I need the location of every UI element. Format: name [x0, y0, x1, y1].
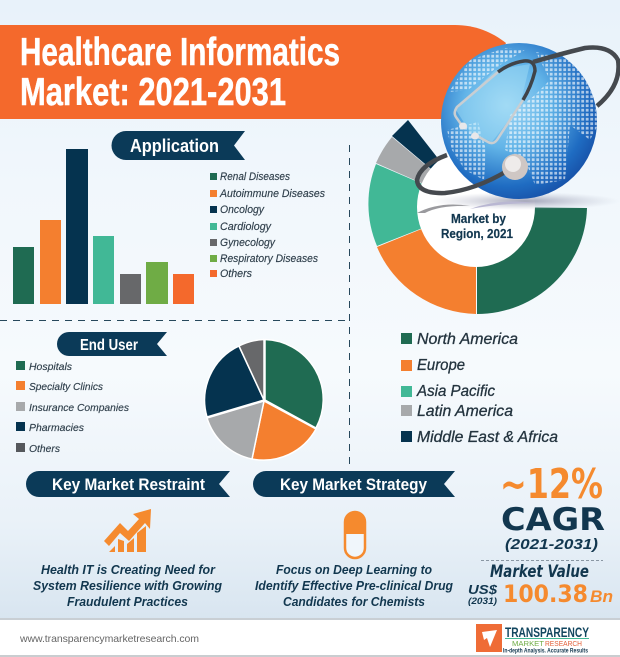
title: Healthcare Informatics — [20, 31, 340, 74]
legend: end user: Pharmacies — [29, 422, 85, 434]
heading: key market restraint: Key Market Restraint — [52, 475, 205, 494]
legend: end user — [16, 361, 130, 455]
logo: transparency market research: RESEARCH — [545, 641, 582, 648]
legend: application: Autoimmune Diseases — [219, 188, 325, 200]
callout: market value — [468, 562, 613, 608]
callout: CAGR: CAGR — [501, 502, 605, 538]
chart: end user pie — [205, 340, 323, 460]
legend: application: Renal Diseases — [220, 171, 290, 183]
legend: end user: Specialty Clinics — [29, 381, 104, 393]
website url: www.transparencymarketresearch.com — [19, 633, 199, 645]
logo: transparency market research: TRANSPARENCY — [505, 624, 589, 640]
callout: CAGR — [500, 460, 605, 553]
heading: end user: End User — [80, 337, 138, 354]
logo: transparency market research — [476, 624, 589, 654]
callout: market value: 100.38 — [503, 580, 588, 608]
chart: market by region donut — [368, 120, 587, 314]
chart: application bars — [13, 149, 194, 304]
legend: end user: Hospitals — [29, 361, 73, 373]
title: Market: 2021-2031 — [20, 71, 286, 114]
legend: end user: Others — [29, 443, 61, 455]
divider lines — [0, 145, 350, 470]
text: restraint description: Fraudulent Practices — [67, 594, 188, 609]
heading: key market strategy — [253, 471, 455, 497]
heading: application — [112, 131, 245, 160]
heading: key market strategy: Key Market Strategy — [280, 475, 427, 494]
legend: end user: Insurance Companies — [29, 402, 130, 414]
heading: end user — [57, 332, 167, 356]
callout: market value: Bn — [590, 587, 613, 606]
title — [20, 31, 340, 114]
legend: application: Cardiology — [220, 221, 272, 233]
callout: CAGR: (2021-2031) — [505, 536, 598, 553]
text: strategy description: Identify Effective Pre-clinical Drug — [255, 578, 453, 593]
legend: application: Oncology — [220, 204, 265, 216]
donut hole — [417, 147, 535, 267]
footer — [0, 618, 620, 657]
icon: globe with stethoscope — [417, 43, 620, 213]
legend: market by region — [401, 331, 558, 446]
panel: header banner — [0, 25, 506, 119]
text: strategy description — [255, 562, 453, 609]
text: restraint description: System Resilience with Growing — [33, 578, 222, 593]
donut centre label — [441, 211, 513, 241]
legend: application: Others — [220, 268, 252, 280]
heading: key market restraint — [26, 471, 230, 497]
callout: market value: Market Value — [490, 562, 589, 582]
legend: market by region: Middle East & Africa — [417, 429, 558, 446]
callout: market value: (2031) — [468, 596, 497, 607]
legend: application: Respiratory Diseases — [220, 253, 318, 265]
donut centre label: Region, 2021 — [441, 226, 513, 241]
legend: market by region: Asia Pacific — [416, 383, 495, 400]
text: strategy description: Candidates for Chemists — [283, 594, 425, 609]
icon: pill capsule — [345, 512, 365, 558]
legend: market by region: Europe — [417, 357, 465, 374]
legend: market by region: North America — [417, 331, 518, 348]
text: strategy description: Focus on Deep Learning to — [276, 562, 432, 577]
callout: market value: US$ — [468, 582, 498, 597]
text: restraint description — [33, 562, 222, 609]
donut centre label: Market by — [451, 211, 507, 226]
legend: application — [210, 171, 325, 280]
logo: transparency market research: MARKET — [512, 641, 545, 648]
stethoscope tubing — [455, 72, 498, 127]
legend: application: Gynecology — [220, 237, 276, 249]
heading: application: Application — [130, 136, 219, 156]
text: restraint description: Health IT is Creating Need for — [41, 562, 216, 577]
icon: rising chart arrow — [104, 509, 151, 552]
legend: market by region: Latin America — [417, 403, 513, 420]
logo: transparency market research: In-depth Analysis. Accurate Results — [503, 648, 589, 654]
